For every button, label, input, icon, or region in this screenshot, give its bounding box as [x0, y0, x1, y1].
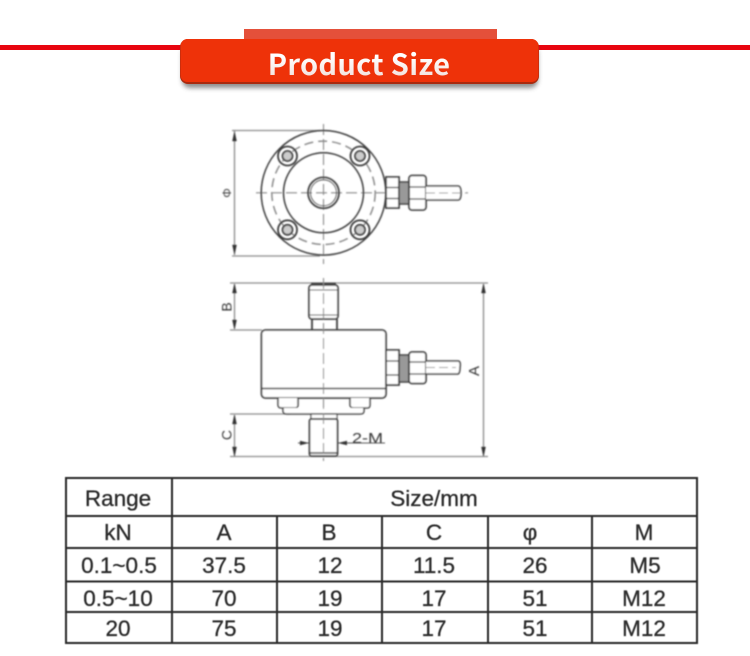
label 2-M: 2-M	[352, 431, 383, 447]
top stud	[309, 284, 338, 330]
row 20: 51	[522, 616, 548, 641]
table text	[81, 486, 666, 641]
flange circles	[261, 130, 386, 255]
phi label: Φ	[220, 188, 234, 198]
label A: A	[466, 366, 483, 376]
row 20: 17	[421, 616, 447, 641]
row 20: 75	[211, 616, 237, 641]
unit row	[104, 520, 653, 545]
row 20: 20	[105, 616, 131, 641]
banner body	[180, 39, 539, 84]
label C: C	[219, 430, 235, 440]
2-M leader	[298, 441, 385, 445]
unit row: M	[635, 520, 653, 545]
header row: Range	[85, 486, 151, 511]
unit row: A	[216, 520, 232, 545]
red header line	[0, 45, 750, 50]
banner shadow	[182, 46, 538, 88]
size table	[66, 478, 697, 643]
dimension arrows	[232, 284, 486, 456]
side view drawing	[219, 278, 488, 461]
textured strip behind banner	[244, 29, 497, 41]
row 0.1~0.5: 0.1~0.5	[81, 553, 157, 578]
row 0.1~0.5: 37.5	[202, 553, 246, 578]
row 0.5~10: 70	[211, 586, 237, 611]
row 0.5~10: M12	[622, 586, 666, 611]
heading: Product Size	[268, 42, 450, 84]
extension lines	[230, 283, 488, 456]
row 0.1~0.5	[81, 553, 661, 578]
centre lines	[256, 124, 468, 264]
dimension lines: phi	[232, 130, 320, 256]
header row: Size/mm	[390, 486, 478, 511]
row 0.5~10: 17	[421, 586, 447, 611]
row 20	[105, 616, 666, 641]
row 0.5~10: 0.5~10	[83, 586, 153, 611]
unit row: B	[321, 520, 337, 545]
cable gland	[386, 350, 460, 385]
row 0.1~0.5: M5	[629, 553, 661, 578]
header banner	[180, 29, 539, 88]
row 20: M12	[622, 616, 666, 641]
centre line	[322, 278, 324, 461]
header row	[85, 486, 478, 511]
row 0.1~0.5: 26	[522, 553, 548, 578]
unit row: C	[426, 520, 442, 545]
row 0.1~0.5: 12	[317, 553, 343, 578]
bolts	[278, 146, 370, 239]
top view drawing	[220, 124, 468, 264]
row 0.1~0.5: 11.5	[413, 553, 455, 578]
row 20: 19	[317, 616, 343, 641]
label B: B	[219, 302, 235, 312]
row 0.5~10	[83, 586, 666, 611]
cable gland	[386, 176, 468, 210]
row 0.5~10: 19	[317, 586, 343, 611]
bolt heads and base plate	[278, 398, 370, 414]
unit row: φ	[523, 520, 537, 545]
body	[262, 330, 386, 398]
bottom stud	[310, 414, 338, 456]
table grid	[66, 478, 697, 643]
row 0.5~10: 51	[522, 586, 548, 611]
unit row: kN	[104, 520, 132, 545]
